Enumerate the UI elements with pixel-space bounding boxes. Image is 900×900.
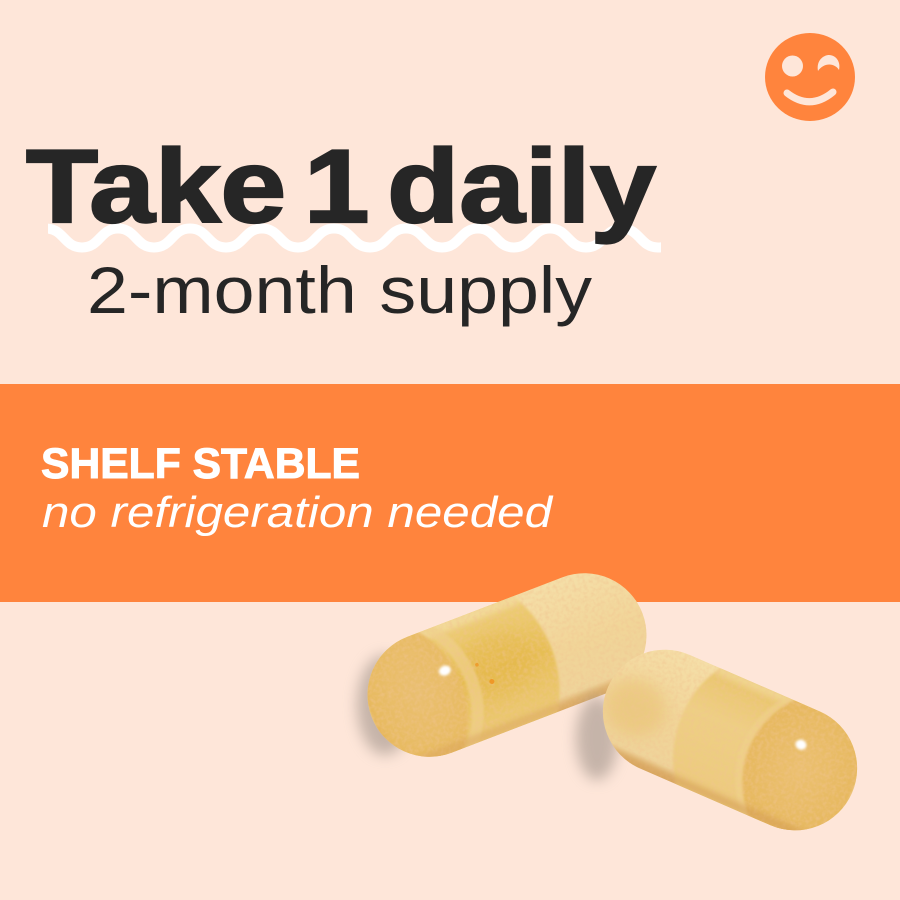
orange band: shelf stable — [0, 384, 900, 602]
text: shelf stable heading: SHELF STABLE — [41, 440, 360, 488]
icon: winking smiley — [765, 33, 855, 121]
subtitle: 2-month supply — [87, 253, 592, 327]
decorative wave underline — [28, 228, 694, 248]
capsule: right — [569, 650, 858, 830]
title: Take 1 daily — [26, 129, 656, 245]
capsule: left — [350, 573, 646, 761]
text: no refrigeration needed: no refrigeration needed — [42, 488, 554, 537]
